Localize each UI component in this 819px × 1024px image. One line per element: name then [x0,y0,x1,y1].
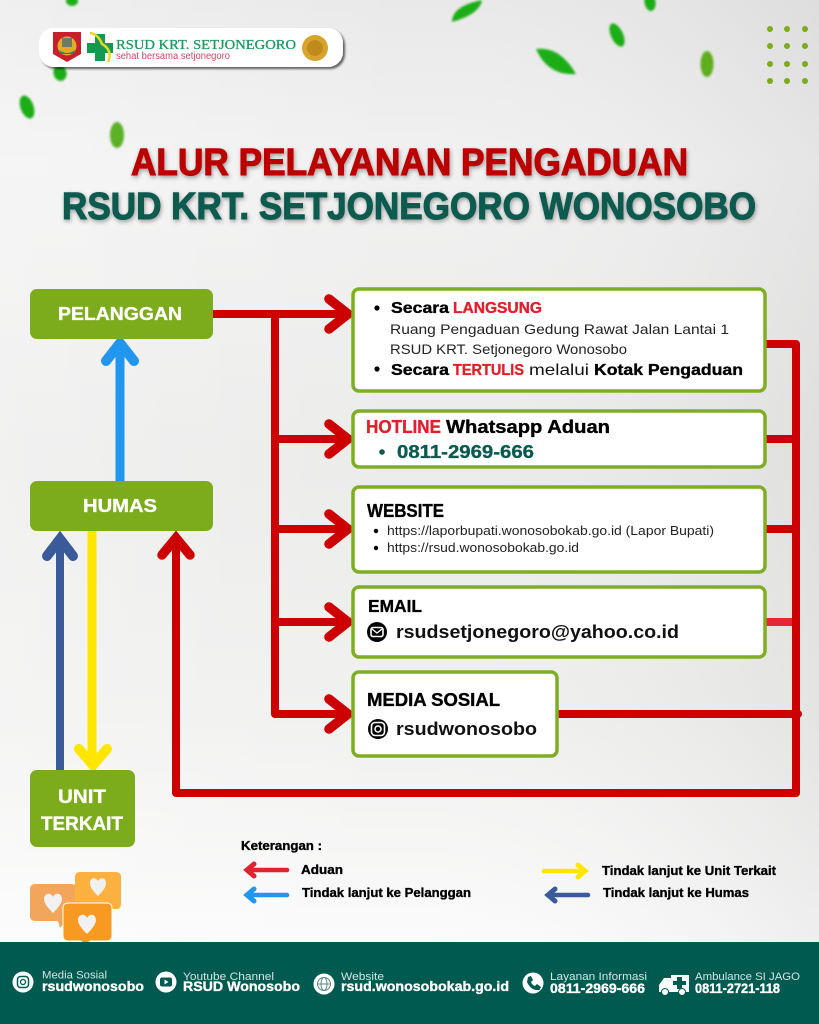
icon: regency shield [53,32,81,62]
navy arrow to humas [47,539,73,770]
icon: envelope [367,622,387,642]
panel: langsung dan tertulis: TERTULIS [453,362,524,379]
footer: ambulance: Ambulance SI JAGO [695,971,800,983]
title line 1: ALUR PELAYANAN PENGADUAN [131,142,688,184]
panel: email: EMAIL [368,596,422,616]
panel: website [353,487,765,572]
panel: langsung dan tertulis: RSUD KRT. Setjonegoro Wonosobo [390,341,627,357]
box: humas: HUMAS [83,495,157,516]
icon: instagram [368,719,388,739]
decorative leaves [17,0,713,148]
icon: heart chat bubbles [30,872,121,948]
footer: website: Website [341,971,384,983]
panel: website: https://rsud.wonosobokab.go.id [387,540,579,555]
legend: tindak lanjut ke humas [548,886,749,901]
footer: media sosial [12,970,144,994]
panel: hotline: Whatsapp Aduan [446,417,610,437]
legend: tindak lanjut ke unit terkait: Tindak lanjut ke Unit Terkait [602,864,777,878]
legend: tindak lanjut ke pelanggan [247,886,471,901]
footer: layanan informasi [522,971,647,996]
decorative dot grid [767,26,808,84]
box: unit terkait: TERKAIT [41,813,123,835]
legend: tindak lanjut ke humas: Tindak lanjut ke Humas [603,886,749,900]
panel: langsung dan tertulis: Kotak Pengaduan [594,362,743,379]
panel: email: rsudsetjonegoro@yahoo.co.id [396,621,679,642]
panel: media sosial: rsudwonosobo [396,718,537,739]
footer: ambulance [659,971,800,996]
box: pelanggan: PELANGGAN [58,303,182,324]
icon: gold accreditation badge [302,35,328,61]
logo name: RSUD KRT. SETJONEGORO [116,38,296,53]
legend: tindak lanjut ke pelanggan: Tindak lanjut ke Pelanggan [302,886,471,900]
panel: langsung dan tertulis: LANGSUNG [453,300,542,317]
box: unit terkait [30,770,135,847]
panel: langsung dan tertulis: Secara [391,362,449,379]
panel: hotline [353,411,765,467]
panel: langsung dan tertulis: Secara [391,300,449,317]
legend: aduan [247,863,343,877]
title line 2: RSUD KRT. SETJONEGORO WONOSOBO [62,186,756,228]
footer: youtube: Youtube Channel [183,971,274,983]
icon: hospital cross [87,33,113,62]
footer: website [314,971,509,994]
footer: youtube [156,971,300,994]
panel: hotline: HOTLINE [366,417,441,437]
footer: layanan informasi: Layanan Informasi [550,971,647,983]
panel: website: WEBSITE [367,501,444,521]
footer: media sosial: rsudwonosobo [42,979,144,994]
title [62,142,756,228]
panel: email [353,587,765,657]
blue arrow to pelanggan [106,343,134,481]
logo bar [39,28,343,67]
legend heading: Keterangan : [241,839,322,853]
red complaint arrows [213,299,348,729]
box: unit terkait: UNIT [58,786,106,808]
panel: langsung dan tertulis [353,289,765,391]
footer: ambulance: 0811-2721-118 [695,981,780,996]
logo tagline: sehat bersama setjonegoro [116,51,230,62]
box: humas [30,481,213,531]
footer: website: rsud.wonosobokab.go.id [341,979,509,994]
panel: langsung dan tertulis: melalui [529,362,589,379]
footer: youtube: RSUD Wonosobo [183,979,300,994]
panel: media sosial: MEDIA SOSIAL [367,690,500,710]
yellow arrow to unit [79,531,107,765]
panel: hotline: 0811-2969-666 [397,441,534,462]
footer [0,942,819,1024]
footer: layanan informasi: 0811-2969-666 [550,981,646,996]
panel: media sosial [353,672,557,756]
box: pelanggan [30,289,213,339]
right return line [162,344,798,793]
panel: website: https://laporbupati.wonosobokab.go.id (Lapor Bupati) [387,523,714,538]
legend [241,839,777,901]
panel: langsung dan tertulis: Ruang Pengaduan Gedung Rawat Jalan Lantai 1 [390,321,729,337]
legend: aduan: Aduan [301,863,343,877]
footer: media sosial: Media Sosial [42,970,107,982]
